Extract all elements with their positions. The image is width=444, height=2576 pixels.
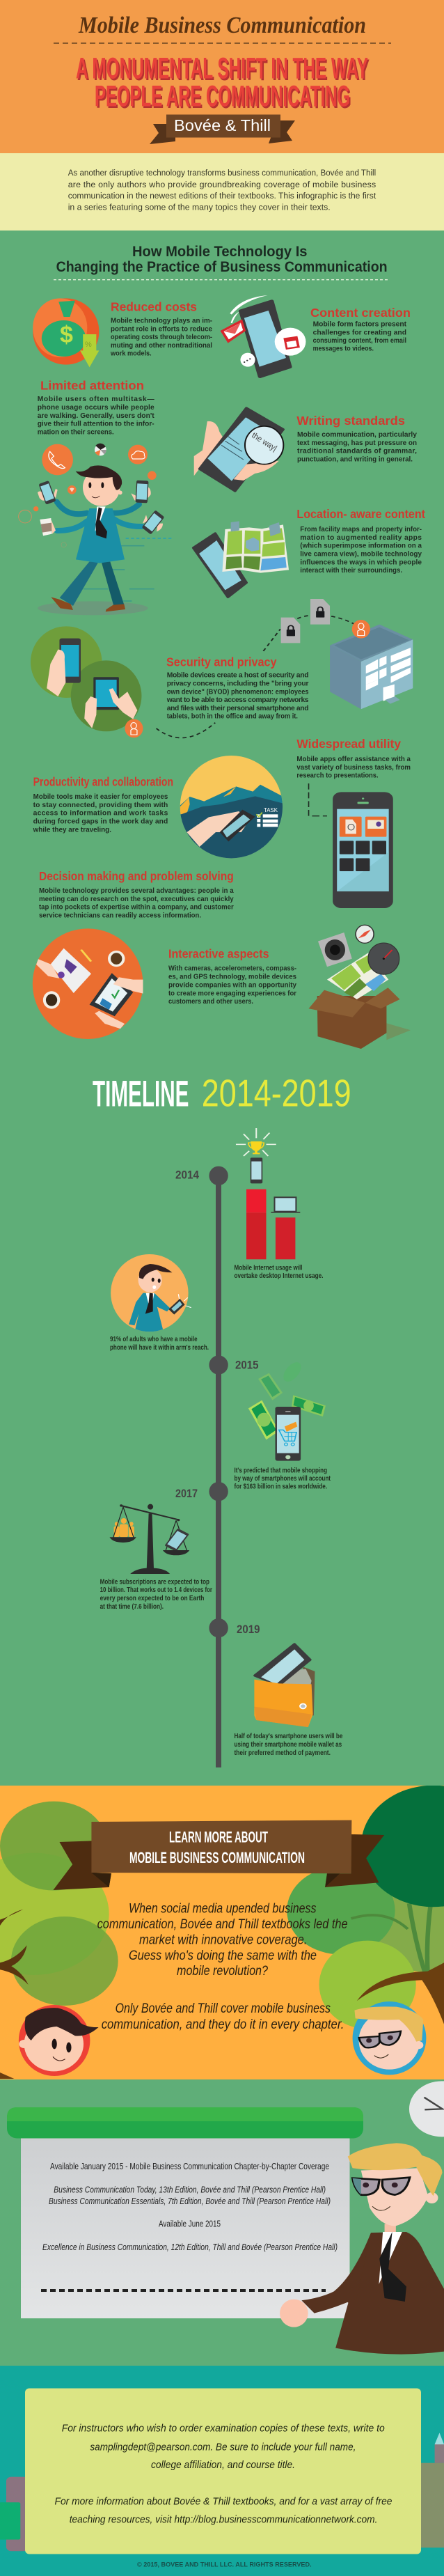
panel: Limited attention — [19, 378, 173, 615]
panel: Productivity and collaboration: access to information and work tasks — [33, 810, 168, 818]
panel: Reduced costs: work models. — [110, 350, 152, 358]
panel: Productivity and collaboration: Productivity and collaboration — [33, 774, 173, 788]
panel: contact card — [25, 2389, 421, 2554]
timeline item: balance scale of people and devices: every person expected to be on Earth — [100, 1595, 204, 1602]
timeline item: balance scale of people and devices: 10 billion. That works out to 1.4 devices for — [100, 1586, 212, 1594]
panel: Decision making and problem solving: tap into pockets of expertise within a company, and customer — [39, 904, 234, 912]
ribbon: Bovée & Thill — [150, 114, 295, 144]
panel: scroll listing textbooks — [7, 2107, 363, 2318]
section heading: How Mobile Technology Is Changing — [54, 244, 388, 280]
panel: Interactive aspects: provide companies with an opportunity — [168, 981, 296, 989]
icon: hand holding phone with magnifier: the way| — [250, 430, 279, 453]
panel: Widespread utility: vast variety of business tasks, from — [296, 764, 411, 772]
timeline item: balance scale of people and devices — [100, 1504, 212, 1611]
illustration: trees behind learn-more band — [0, 1786, 444, 2079]
icon: mountains, hand with phone and task list — [179, 754, 285, 861]
panel: scroll listing textbooks: Business Communication Essentials, 7th Edition, Bovée and Thill (Pearson Prentice Hall) — [49, 2196, 331, 2206]
panel: scroll listing textbooks: Business Communication Today, 13th Edition, Bovée and Thill (Pearson Prentice Hall) — [54, 2185, 326, 2194]
timeline item: man with phone, 91% of adults: 91% of adults who have a mobile — [110, 1336, 198, 1343]
panel: Location-aware content: live camera view), mobile technology — [300, 550, 422, 558]
icon: multitasking man with four arms — [19, 444, 173, 615]
icon: blond face with glasses in blue circle — [353, 2001, 426, 2075]
panel: Widespread utility: research to presentations. — [296, 772, 379, 780]
icon: money bag: % — [85, 341, 92, 349]
icon: mountains, hand with phone and task list: TASK — [264, 806, 278, 813]
chart: mobile vs desktop usage bars with trophy: Mobile Internet usage will — [234, 1264, 303, 1272]
panel: scroll listing textbooks: Available June 2015 — [159, 2219, 221, 2229]
panel: Security and privacy: Mobile devices create a host of security and — [167, 672, 309, 680]
timeline item: smartphone in a wallet — [234, 1644, 343, 1757]
panel: Interactive aspects: to create more engaging experiences for — [168, 990, 296, 997]
panel: Content creation — [221, 295, 411, 377]
panel: Writing standards: Writing standards — [296, 414, 405, 428]
icon: wall clock — [409, 2081, 444, 2137]
panel: Reduced costs: portant role in efforts to reduce — [111, 325, 212, 333]
panel: Security and privacy: want to be able to access company networks — [166, 696, 309, 704]
banner: Learn more about Mobile Business Communication: LEARN MORE ABOUT — [169, 1828, 268, 1845]
panel: Limited attention: Limited attention — [40, 378, 144, 392]
timeline item: shopping phone with dollar bills: It's predicted that mobile shopping — [234, 1467, 327, 1474]
panel: Writing standards: text messaging, has put pressure on — [297, 439, 417, 447]
decor: books and pencils beside contact card — [0, 2433, 444, 2551]
panel: Limited attention: phone usage occurs while people — [38, 404, 154, 412]
timeline title: TIMELINE — [93, 1073, 189, 1114]
illustration: presenter with glasses and brown suit — [280, 2143, 444, 2355]
panel: Decision making and problem solving: service technicians can readily access information. — [39, 912, 201, 920]
icon: smiling dark-haired face in red circle — [19, 2005, 99, 2076]
panel: Reduced costs: Mobile technology plays an im- — [111, 317, 213, 325]
panel: Limited attention: mation on their screens. — [38, 429, 114, 437]
panel: Productivity and collaboration: during forced gaps in the work day and — [33, 818, 168, 825]
intro paragraph: communication in the newest editions of their textbooks. This infographic is the first — [68, 191, 376, 201]
panel: Writing standards — [194, 408, 417, 491]
icon: meeting table with tablet, report and coffee — [33, 928, 143, 1039]
timeline item: smartphone in a wallet: their preferred method of payment. — [234, 1749, 331, 1757]
panel: scroll listing textbooks: Available January 2015 - Mobile Business Communication Chapter-by-Chapter Coverage — [50, 2162, 329, 2171]
panel: contact card: teaching resources, visit http://blog.businesscommunicationnetwork.com. — [70, 2514, 377, 2526]
section heading: How Mobile Technology Is Changing: Changing the Practice of Business Communication — [56, 259, 388, 275]
panel: Location-aware content — [193, 507, 425, 597]
intro paragraph: As another disruptive technology transforms business communication, Bovée and Thill — [68, 168, 376, 178]
panel: contact card: For more information about Bovée & Thill textbooks, and for a vast array of free — [54, 2496, 393, 2508]
timeline axis with year nodes: 2017 — [175, 1487, 198, 1500]
panel: Security and privacy: and files with their personal smartphone and — [167, 705, 309, 712]
timeline title: 2014-2019 — [202, 1071, 351, 1114]
panel: Limited attention: give their full attention to the infor- — [38, 421, 154, 428]
chart: mobile vs desktop usage bars with trophy: overtake desktop Internet usage. — [234, 1272, 324, 1280]
icon: hands holding phone and tablet — [31, 626, 143, 737]
panel: Decision making and problem solving: Mobile technology provides several advantages: people in a — [39, 887, 234, 895]
panel: Productivity and collaboration: Mobile tools make it easier for employees — [33, 793, 168, 801]
panel: Content creation: challenges for creating and — [313, 329, 406, 336]
panel: contact card: college affiliation, and course title. — [151, 2459, 295, 2471]
phones, hands and coffee cup — [38, 481, 164, 536]
intro paragraph: in a series featuring some of the many topics they cover in their texts. — [68, 203, 331, 212]
panel: Location-aware content: (which superimpose information on a — [300, 542, 422, 550]
icon: phone with envelope and clapper — [221, 295, 306, 377]
timeline item: shopping phone with dollar bills: by way of smartphones will account — [234, 1475, 331, 1483]
timeline item: balance scale of people and devices: at that time (7.6 billion). — [100, 1603, 164, 1611]
icon: money bag — [33, 298, 99, 367]
panel: Productivity and collaboration: while they are traveling. — [33, 826, 111, 834]
panel: Interactive aspects: With cameras, accelerometers, compass- — [168, 965, 297, 973]
timeline item: man with phone, 91% of adults — [110, 1254, 209, 1352]
panel: Content creation: messages to videos. — [313, 345, 374, 353]
intro paragraph — [68, 168, 376, 212]
background: orange header band — [0, 0, 444, 153]
background: orange learn-more band — [0, 1786, 444, 2079]
scroll paper — [21, 2138, 349, 2318]
background: green main section — [0, 231, 444, 1786]
panel: Writing standards: Mobile communication, particularly — [297, 431, 417, 439]
legs and shoes — [51, 562, 125, 611]
text: social media paragraph — [97, 1902, 348, 2032]
text: social media paragraph: mobile revolution? — [177, 1964, 268, 1978]
icon: hand holding phone with magnifier — [194, 408, 283, 491]
panel: Location-aware content: mation to augmented reality apps — [300, 534, 422, 542]
headline with drop shadow — [76, 52, 370, 115]
panel: Security and privacy: Security and privacy — [166, 655, 277, 669]
panel: Widespread utility: Widespread utility — [296, 737, 401, 751]
panel: Location-aware content: interact with their surroundings. — [300, 567, 402, 575]
panel: Content creation: Content creation — [310, 306, 411, 320]
panel: Decision making and problem solving: Decision making and problem solving — [39, 869, 234, 883]
panel: Writing standards: traditional standards of grammar, — [297, 448, 417, 455]
icon: money bag: $ — [60, 322, 73, 348]
panel: Location-aware content: Location- aware content — [296, 507, 425, 521]
icon: phone and map — [193, 521, 289, 597]
ribbon: Bovée & Thill: Bovée & Thill — [174, 116, 271, 134]
timeline axis with year nodes: 2019 — [237, 1623, 260, 1636]
arms — [57, 502, 142, 531]
timeline axis with year nodes: 2014 — [175, 1169, 199, 1182]
panel: Interactive aspects: customers and other users. — [168, 998, 253, 1006]
background: cream intro band — [0, 153, 444, 231]
panel: Widespread utility — [296, 737, 411, 908]
panel: Interactive aspects: Interactive aspects — [168, 947, 269, 961]
text: social media paragraph: communication, Bovée and Thill textbooks led the — [97, 1917, 348, 1932]
panel: Security and privacy: own device" (BYOD) phenomenon: employees — [167, 688, 309, 696]
timeline item: man with phone, 91% of adults: phone will have it within arm's reach. — [110, 1344, 209, 1352]
timeline item: shopping phone with dollar bills — [234, 1360, 331, 1491]
timeline axis with year nodes: 2015 — [235, 1358, 259, 1371]
panel: Reduced costs — [33, 298, 213, 367]
panel: contact card: samplingdept@pearson.com. Be sure to include your full name, — [90, 2441, 356, 2453]
background: green books band — [0, 2079, 444, 2366]
panel: contact card: For instructors who wish to order examination copies of these texts, write to — [62, 2423, 385, 2435]
chart: mobile vs desktop usage bars with trophy — [234, 1128, 324, 1280]
text: social media paragraph: When social media upended business — [129, 1902, 317, 1917]
panel: Security and privacy — [31, 599, 413, 737]
background: teal footer band — [0, 2366, 444, 2576]
timeline item: smartphone in a wallet: using their smartphone mobile wallet as — [234, 1741, 342, 1749]
panel: Reduced costs: Reduced costs — [111, 300, 197, 314]
text: social media paragraph: communication, and they do it in every chapter. — [102, 2017, 344, 2032]
panel: Productivity and collaboration: to stay connected, providing them with — [33, 802, 168, 809]
banner: Learn more about Mobile Business Communication — [53, 1820, 384, 1890]
panel: scroll listing textbooks: Excellence in Business Communication, 12th Edition, Thill and Bovée (Pearson Prentice Hall) — [42, 2242, 338, 2252]
section heading: How Mobile Technology Is Changing: How Mobile Technology Is — [132, 244, 308, 260]
panel: Interactive aspects — [168, 925, 411, 1049]
title: Mobile Business Communication: Mobile Business Communication — [78, 13, 366, 38]
text: social media paragraph: Guess who's doing the same with the — [129, 1949, 317, 1963]
head — [76, 465, 122, 506]
panel: Widespread utility: Mobile apps offer assistance with a — [296, 756, 411, 763]
panel: Security and privacy: tablets, both in the office and away from it. — [167, 713, 298, 721]
panel: Decision making and problem solving: meeting can do research on the spot, executives can quickly — [39, 896, 234, 903]
timeline item: shopping phone with dollar bills: for $163 billion in sales worldwide. — [234, 1483, 327, 1491]
panel: Limited attention: are walking. Generally, users don't — [38, 412, 154, 420]
banner: Learn more about Mobile Business Communication: MOBILE BUSINESS COMMUNICATION — [129, 1849, 305, 1866]
header block — [54, 13, 391, 144]
panel: Limited attention: Mobile users often multitask— — [38, 396, 154, 403]
panel: Location-aware content: influences the ways in which people — [300, 559, 422, 566]
scroll roller — [7, 2107, 363, 2138]
panel: Writing standards: punctuation, and writing in general. — [297, 455, 413, 463]
intro paragraph: are the only authors who provide groundbreaking coverage of mobile business — [68, 180, 376, 189]
icon: phone with app tiles — [309, 783, 393, 908]
panel: Reduced costs: operating costs through telecom- — [111, 334, 213, 341]
timeline axis with year nodes — [175, 1166, 260, 1767]
panel: Interactive aspects: es, and GPS technology, mobile devices — [168, 974, 296, 981]
copyright footer: © 2015, BOVEE AND THILL LLC. ALL RIGHTS RESERVED. — [137, 2561, 312, 2568]
panel: Content creation: consuming content, from email — [313, 337, 406, 345]
icon bubbles — [19, 444, 157, 547]
panel: Decision making and problem solving — [39, 869, 234, 920]
panel: Security and privacy: privacy concerns, including the "bring your — [167, 680, 309, 687]
text: social media paragraph: market with innovative coverage. — [139, 1933, 308, 1948]
icon: building, locked documents and dashed connection — [157, 599, 413, 737]
panel: Content creation: Mobile form factors present — [313, 320, 407, 328]
timeline item: smartphone in a wallet: Half of today's smartphone users will be — [234, 1733, 343, 1740]
panel: Reduced costs: muting and other nontraditional — [111, 342, 212, 350]
panel: Location-aware content: From facility maps and property infor- — [300, 526, 422, 533]
text: social media paragraph: Only Bovée and Thill cover mobile business — [116, 2001, 331, 2016]
icon: open box with map, gauge, camera and compass — [309, 925, 411, 1049]
timeline title — [93, 1071, 351, 1114]
panel: Productivity and collaboration — [33, 754, 285, 861]
timeline item: balance scale of people and devices: Mobile subscriptions are expected to top — [100, 1578, 209, 1586]
